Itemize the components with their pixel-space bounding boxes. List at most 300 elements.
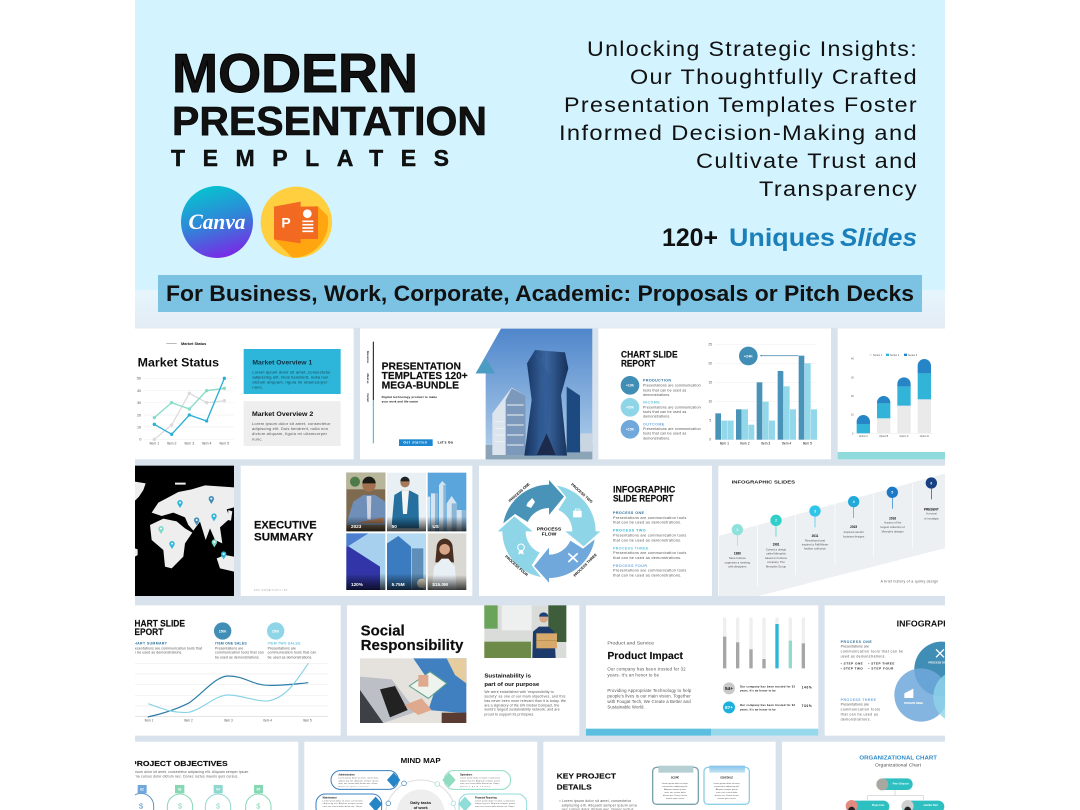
- slide: timeline infographic: A brief history of a quirky design: [881, 580, 938, 584]
- slide: key project details: • Lorem ipsum dolor sit amet, consectetur: [559, 799, 632, 803]
- slide: mind map: of work: [414, 805, 429, 810]
- slide: presentation mega bundle: Digital technology product to make: [382, 395, 437, 399]
- stat: 54+: years. It's an honor to be: [740, 689, 776, 693]
- card: market overview 1: [244, 349, 341, 394]
- org node: top: [876, 778, 913, 790]
- slide: chart report: +15K: [626, 428, 635, 432]
- slide: process flow: PROCESS ONE: [613, 511, 645, 515]
- slide: chart report: +50K: [626, 406, 635, 410]
- slide: chart report: tools that can be used as: [643, 388, 687, 392]
- card: scope: Lorem ipsum dolor sit amet,: [662, 782, 689, 785]
- card: market overview 1: dictum aliquam, ligula mi ullamcorper: [252, 379, 328, 384]
- timeline labels: 2015: [850, 525, 857, 529]
- cycle diagram: PROCESS THREE: [573, 552, 598, 578]
- node: maintenance: [316, 794, 391, 810]
- slide: process flow: that can be used as demonstrations.: [613, 538, 681, 542]
- timeline labels: organizes a meeting: [725, 560, 750, 564]
- objective icons: 02: [140, 788, 144, 792]
- tagline text: [559, 38, 918, 201]
- banner: [158, 275, 922, 312]
- slide: process flow: Presentations are communication tools: [613, 516, 686, 520]
- slide: product impact: people's lives is our main vision. Together: [607, 693, 691, 698]
- node: maintenance: Lorem ipsum dolor sit amet, consectetur: [323, 799, 363, 802]
- line chart: Item 4: [263, 719, 272, 723]
- slide: product impact: Product and Service: [607, 640, 655, 645]
- slide: social responsibility: Responsibility: [361, 637, 464, 654]
- icon: medal: [518, 544, 524, 555]
- line chart: [137, 377, 234, 445]
- timeline markers: 4: [853, 500, 855, 504]
- slide: chart report: tools that can be used as: [643, 432, 687, 436]
- timeline markers: [732, 477, 937, 546]
- card: scope: SCOPE: [671, 778, 680, 780]
- slide: chart report: Presentations are communication: [643, 405, 701, 409]
- card: market overview 2: Market Overview 2: [252, 411, 314, 418]
- slide: social responsibility: part of our purpose: [484, 682, 539, 688]
- bar chart: 15: [708, 380, 712, 384]
- card: scope: [653, 766, 698, 804]
- slide: infographic venn: Presentations are: [841, 703, 869, 707]
- timeline labels: A revival: [926, 512, 937, 516]
- title: MODERN: [172, 42, 418, 104]
- bar chart: [708, 342, 817, 446]
- stat: 87+: Our company has been trusted for 32: [740, 703, 796, 707]
- timeline labels: Coined a design: [766, 547, 787, 551]
- stat: 87+: [723, 701, 812, 713]
- slide: chart report: demonstrations.: [643, 436, 670, 440]
- infographic canvas: [135, 0, 945, 810]
- slide: chart report lines: 250K: [272, 629, 280, 633]
- lower background: [135, 290, 945, 810]
- photo: businessman 2023: 2023: [351, 524, 362, 529]
- timeline markers: 2: [775, 519, 777, 523]
- timeline labels: [725, 507, 939, 569]
- slide: social responsibility: Sustainability is: [484, 674, 531, 680]
- slide: chart report: +10K: [626, 384, 635, 388]
- slide: infographic venn: used as demonstrations.: [841, 654, 886, 658]
- slide: social responsibility: proud to support its principles.: [484, 712, 534, 716]
- photo: towers US: US: [432, 524, 439, 529]
- timeline markers: 3: [814, 509, 816, 513]
- slide: chart report lines: Presentations are communication tools that: [131, 646, 202, 650]
- slide: market status: [133, 328, 354, 459]
- tagline text: Presentation Templates Foster: [564, 94, 918, 117]
- tagline text: Cultivate Trust and: [696, 150, 918, 173]
- card: market overview 1: Lorem ipsum dolor sit amet, consectetur: [252, 369, 331, 374]
- icon: tools: [568, 553, 578, 562]
- node: administration: [331, 771, 406, 789]
- line chart: Item 2: [184, 719, 193, 723]
- slide: organizational chart: [782, 742, 949, 810]
- header background: [135, 0, 945, 290]
- timeline markers: 6: [930, 481, 932, 485]
- row two slides: [133, 466, 472, 596]
- timeline labels: largest collection of: [881, 525, 905, 529]
- card: schedule: Lorem ipsum dolor sit amet,: [713, 782, 740, 785]
- timeline labels: Auction of the: [884, 521, 902, 525]
- bar chart: 25: [708, 342, 712, 346]
- photo grid: [346, 473, 466, 590]
- timeline labels: company. The: [767, 560, 785, 564]
- slide: presentation mega bundle: Contact: [366, 393, 369, 402]
- button: [399, 439, 433, 446]
- title: [171, 53, 484, 166]
- slide: chart report lines: REPORT: [128, 627, 164, 637]
- slide: stacked bars: 30: [851, 376, 854, 379]
- stat: 54+: Our company has been trusted for 32: [740, 684, 796, 688]
- slide: social responsibility: world's largest sustainability network, and are: [484, 708, 560, 712]
- tagline text: Our Thoughtfully Crafted: [630, 66, 918, 89]
- card: market overview 2: dictum aliquam, ligula mi ullamcorper: [252, 431, 328, 436]
- slide: presentation mega bundle: TEMPLATES 120+: [382, 371, 468, 382]
- card: market overview 2: [244, 401, 341, 446]
- bar chart: 5: [709, 419, 711, 423]
- slide: process flow: INFOGRAPHIC: [613, 485, 676, 495]
- photo: glass building: 5.75M: [392, 582, 405, 587]
- slide: project objectives: PROJECT OBJECTIVES: [131, 761, 228, 768]
- timeline labels: Inspired colorful: [844, 530, 864, 534]
- slide: product impact: Sustainable World.: [607, 705, 645, 710]
- timeline labels: based on fortress: [765, 556, 788, 560]
- header fade strip: [135, 290, 945, 328]
- slide: mind map: Daily tasks: [410, 800, 432, 805]
- slide: world map: [133, 466, 234, 596]
- slide: market status: Market Status: [181, 342, 207, 346]
- slide: infographic venn: Presentations are: [841, 645, 869, 649]
- slide: infographic venn: • STEP ONE: [841, 662, 863, 666]
- row three slides: [128, 605, 579, 736]
- objective icons: 04: [216, 788, 220, 792]
- slide: process flow: that can be used as demonstrations.: [613, 521, 681, 525]
- timeline labels: 2011: [812, 534, 819, 538]
- cycle diagram: PROCESS ONE: [508, 482, 531, 503]
- photo: purple building: 120%: [351, 582, 364, 587]
- card: market overview 1: Market Overview 1: [252, 360, 313, 367]
- card: market overview 2: Lorem ipsum dolor sit amet, consectetur: [252, 421, 331, 426]
- line chart: Item 1: [145, 719, 154, 723]
- timeline labels: 2016: [889, 516, 896, 520]
- line chart: Item 5: [303, 719, 312, 723]
- org node: right: [902, 800, 944, 810]
- timeline labels: called Memphis: [766, 552, 786, 556]
- slide: chart report: CHART SLIDE: [621, 350, 678, 360]
- slide: process flow: PROCESS THREE: [613, 546, 649, 550]
- slide: stacked bars: Series 3: [908, 354, 918, 357]
- slide: social responsibility: are a signatory of the UN Global Compact, the: [484, 703, 559, 707]
- slide: product impact: [586, 605, 818, 736]
- node: operations: urna, nec cursus dolor dictum nec. Donec: [460, 782, 499, 785]
- slide: product impact: Product Impact: [607, 651, 684, 662]
- tagline text: Unlocking Strategic Insights:: [587, 38, 918, 61]
- slide: presentation mega bundle: [360, 328, 592, 459]
- slide: infographic venn: • STEP THREE: [868, 662, 894, 666]
- slide: chart report: INCOME: [643, 401, 660, 405]
- slide: chart report lines: can be used as demonstrations.: [130, 651, 182, 655]
- slide: social responsibility: We were established with 'responsibility to: [484, 690, 554, 694]
- slide: stacked bars: Option D: [920, 435, 929, 438]
- cycle diagram: [498, 480, 600, 583]
- slide: stacked bars: [838, 328, 951, 459]
- slide: product impact: Providing Appropriate Technology to help: [607, 688, 692, 693]
- slide count heading: Uniques: [729, 224, 835, 252]
- slide: chart report: OUTCOME: [643, 422, 665, 426]
- timeline labels: 1981: [772, 543, 780, 547]
- node: financial reporting: Financial Reporting: [475, 796, 497, 799]
- slide: infographic venn: [825, 605, 987, 736]
- slide: executive summary: [241, 466, 472, 596]
- cycle diagram: FLOW: [542, 531, 557, 537]
- slide: stacked bars: Series 2: [890, 354, 900, 357]
- objective icons: 05: [256, 788, 260, 792]
- slide: chart report lines: CHART SUMMARY: [131, 641, 168, 645]
- stat: 54+: 54+: [725, 686, 733, 691]
- icon: briefcase: [573, 509, 582, 517]
- slide: mind map: [304, 742, 537, 810]
- line chart: Item 4: [202, 441, 212, 445]
- timeline labels: PRESENT: [924, 507, 939, 511]
- slide: infographic venn: that can be used as: [841, 712, 878, 716]
- bar chart: Item 2: [740, 442, 750, 446]
- node: maintenance: urna, nec cursus dolor dictum nec. Donec: [323, 805, 362, 808]
- card: scope: consectetur adipiscing elit.: [662, 785, 688, 788]
- slide: chart report: [598, 328, 831, 459]
- card: market overview 1: adipiscing elit. Duis hendrerit, nulla non: [252, 374, 328, 379]
- venn diagram: PROCESS THREE: [904, 701, 924, 705]
- icon: powerpoint logo: P: [281, 215, 291, 231]
- line chart: 10: [137, 425, 141, 429]
- slide: stacked bars: 20: [851, 395, 854, 398]
- line chart: Item 3: [184, 441, 194, 445]
- tagline text: Transparency: [759, 178, 918, 201]
- slide: chart report: REPORT: [621, 359, 656, 369]
- stat: 54+: 140%: [802, 686, 812, 690]
- card: schedule: urna, nec cursus dolor: [716, 791, 738, 794]
- slide: stacked bars: Series 1: [873, 354, 883, 357]
- timeline labels: 1980: [734, 551, 741, 555]
- slide: chart report lines: ITEM TWO SALES: [268, 641, 301, 645]
- line chart: 0: [139, 438, 141, 442]
- slide count heading: 120+: [662, 224, 718, 252]
- slide: process flow: SLIDE REPORT: [613, 494, 674, 504]
- tagline text: Informed Decision-Making and: [559, 122, 918, 145]
- node: financial reporting: Lorem ipsum dolor sit amet, consectetur: [475, 799, 515, 802]
- card: scope: dictum nec. Donec luctus: [663, 794, 687, 797]
- row one slides: [133, 328, 592, 459]
- card: scope: mauris quis cursus: [666, 797, 684, 800]
- slide: chart report lines: Presentations are: [215, 646, 243, 650]
- slide: stacked bars: Option A: [859, 435, 868, 438]
- objective icons: [128, 785, 271, 810]
- slide: infographic venn: • STEP FOUR: [868, 667, 894, 671]
- slide: process flow: that can be used as demonstrations.: [613, 574, 681, 578]
- slide: executive summary: www.reallygreatsite.com: [254, 589, 288, 592]
- node: financial reporting: adipiscing elit. Aliquam semper ipsum: [475, 802, 515, 805]
- slide: social responsibility: Social: [361, 623, 405, 640]
- slide: key project details: KEY PROJECT: [557, 771, 617, 780]
- slide: market status: Market Status: [138, 356, 219, 370]
- line chart: 30: [137, 401, 141, 405]
- icon: powerpoint logo: [261, 187, 332, 258]
- photo: skyscrapers: [476, 329, 592, 459]
- icon: canva logo: [181, 186, 253, 258]
- slide: organizational chart: Organizational Chart: [875, 762, 922, 767]
- timeline labels: Store fortress: [729, 556, 746, 560]
- slide: infographic venn: communication tools that can be: [841, 649, 903, 653]
- callout: +24K: [744, 354, 753, 358]
- bar chart: Item 5: [803, 442, 812, 446]
- slide: chart report lines: be used as demonstrations.: [215, 655, 260, 659]
- slide: social responsibility: [347, 605, 579, 736]
- line chart: Item 3: [224, 719, 233, 723]
- slide: mind map: MIND MAP: [401, 758, 441, 765]
- slide: process flow: that can be used as demonstrations.: [613, 556, 681, 560]
- slide: project objectives: urna cursus dolor dictum nec. Donec luctus mauris quis cursus.: [132, 775, 238, 779]
- slide: project objectives: Lorem ipsum dolor sit amet, consectetur adipiscing elit. Aliquam semper ipsum: [122, 770, 249, 774]
- slide: chart report: demonstrations.: [643, 415, 670, 419]
- cycle diagram: PROCESS: [537, 526, 562, 532]
- slide: chart report lines: [128, 605, 341, 736]
- slide: executive summary: SUMMARY: [254, 532, 313, 544]
- org node: left: Bryan Cole: [872, 805, 885, 807]
- slide: key project details: DETAILS: [557, 783, 592, 792]
- slide: presentation mega bundle: PRESENTATION: [382, 362, 461, 373]
- slide: process flow: PROCESS FOUR: [613, 564, 647, 568]
- slide: process flow: Presentations are communication tools: [613, 569, 686, 573]
- slide: presentation mega bundle: Let's Go: [438, 441, 453, 445]
- slide: chart report lines: ITEM ONE SALES: [215, 641, 247, 645]
- timeline labels: with designers: [728, 565, 747, 569]
- slide: chart report lines: communication tools that can: [215, 651, 264, 655]
- node: operations: adipiscing elit. Aliquam semper ipsum: [460, 779, 500, 782]
- card: scope: Aliquam semper ipsum: [664, 788, 686, 791]
- venn diagram: [894, 642, 987, 723]
- bar chart: 0: [709, 438, 711, 442]
- photo: businessman 50: 50: [392, 524, 397, 529]
- node: administration: Lorem ipsum dolor sit amet, consectetur: [338, 777, 379, 780]
- venn diagram: PROCESS ONE: [928, 660, 948, 664]
- card: market overview 2: nunc.: [252, 437, 263, 442]
- slide: stacked bars: 10: [851, 414, 854, 417]
- org node: top: Peter Simpson: [893, 782, 910, 785]
- slide: stacked bars: 40: [851, 357, 854, 360]
- line chart: 20: [137, 413, 141, 417]
- cycle diagram: PROCESS TWO: [570, 483, 593, 504]
- node: maintenance: Maintenance: [323, 796, 337, 799]
- timeline labels: of nostalgia: [924, 516, 939, 520]
- slide: social responsibility: has never been more relevant than it is today. We: [484, 699, 566, 703]
- node: operations: mauris quis cursus: [460, 785, 490, 788]
- org node: left: [846, 800, 889, 810]
- slide: process flow: Presentations are communication tools: [613, 533, 686, 537]
- progress bars: [723, 617, 805, 668]
- line chart: 40: [137, 389, 141, 393]
- slide: key project details: adipiscing elit. Aliquam semper ipsum urna: [562, 803, 637, 807]
- title: TEMPLATES: [171, 145, 449, 171]
- timeline markers: 5: [891, 491, 893, 495]
- slide: presentation mega bundle: MEGA-BUNDLE: [382, 380, 460, 391]
- slide: product impact: Our company has been trusted for 32: [607, 667, 686, 672]
- node: financial reporting: urna, nec cursus dolor dictum nec. Donec: [475, 805, 514, 808]
- bar chart: Item 4: [782, 442, 791, 446]
- stat: 87+: years. It's an honor to be: [740, 707, 776, 711]
- cycle diagram: PROCESS FOUR: [504, 555, 529, 577]
- slide: timeline infographic: INFOGRAPHIC SLIDES: [732, 480, 796, 486]
- timeline labels: Memphis Group: [766, 564, 786, 568]
- slide: executive summary: EXECUTIVE: [254, 519, 317, 531]
- slide: infographic venn: • STEP TWO: [841, 667, 863, 671]
- slide: stacked bars: 0: [852, 432, 854, 435]
- slide: infographic venn: demonstrations.: [841, 717, 871, 721]
- slide: social responsibility: society' as one of our main objectives, and this: [484, 694, 566, 698]
- line chart: 50: [137, 377, 141, 381]
- slide: process flow: Presentations are communication tools: [613, 551, 686, 555]
- stat: 87+: 87+: [725, 705, 733, 710]
- stat: 54+: [723, 682, 812, 694]
- slide: chart report: PRODUCTION: [643, 379, 671, 383]
- stat: 87+: 730%: [802, 704, 812, 708]
- slide: project objectives: [122, 742, 298, 810]
- slide: chart report: tools that can be used as: [643, 410, 687, 414]
- title: PRESENTATION: [172, 98, 487, 144]
- slide: chart report lines: 150K: [219, 629, 227, 633]
- photo: delivery man: [484, 605, 566, 658]
- timeline labels: fashion collection: [804, 547, 826, 551]
- line chart: Item 2: [167, 441, 177, 445]
- card: schedule: dictum nec. Donec luctus: [715, 794, 739, 797]
- slide: presentation mega bundle: About us: [366, 373, 369, 384]
- node: financial reporting: [451, 794, 527, 810]
- card: market overview 2: adipiscing elit. Duis hendrerit, nulla non: [252, 426, 328, 431]
- timeline labels: Resurfaced and: [805, 539, 825, 543]
- objective icons: 03: [178, 788, 182, 792]
- slide: stacked bars: Option C: [899, 435, 909, 438]
- timeline labels: inspired a Fall/Winter: [802, 543, 828, 547]
- org node: right: Jennifer Ruiz: [923, 805, 939, 807]
- card: schedule: consectetur adipiscing elit.: [714, 785, 740, 788]
- slide: product impact: years. It's an honor to be: [607, 673, 660, 678]
- node: maintenance: adipiscing elit. Aliquam semper ipsum: [323, 802, 363, 805]
- slide: presentation mega bundle: Resources: [366, 351, 368, 364]
- icon: tag: [526, 498, 535, 508]
- card: schedule: SCHEDULE: [720, 778, 734, 780]
- slide: timeline infographic: [718, 466, 952, 596]
- line chart: [135, 663, 328, 723]
- timeline labels: Memphis designs: [882, 529, 904, 533]
- slide: product impact: with Fougat Tech, We Create a Better and: [607, 699, 691, 704]
- node: administration: Administration: [338, 773, 355, 776]
- timeline markers: 1: [736, 528, 738, 532]
- slide: chart report lines: Presentations are: [268, 646, 296, 650]
- slide: stacked bars: Option B: [879, 435, 889, 438]
- card: scope: urna, nec cursus dolor: [664, 791, 686, 794]
- button: Get started: [403, 441, 427, 445]
- line chart: Item 1: [149, 441, 159, 445]
- card: market overview 1: nunc.: [252, 385, 263, 390]
- bar chart: Item 1: [720, 442, 729, 446]
- stacked column chart: [857, 359, 931, 433]
- slide: chart report: Presentations are communication: [643, 384, 701, 388]
- slide: infographic venn: communication tools: [841, 707, 880, 711]
- bar chart: 10: [708, 400, 712, 404]
- slide: organizational chart: ORGANIZATIONAL CHART: [859, 755, 938, 761]
- line chart: Item 5: [219, 441, 229, 445]
- node: administration: adipiscing elit. Aliquam semper ipsum: [338, 779, 379, 782]
- node: operations: Lorem ipsum dolor sit amet, consectetur: [460, 777, 500, 780]
- slide: chart report lines: be used as demonstrations.: [268, 655, 312, 659]
- slide count heading: Slides: [840, 224, 917, 252]
- timeline labels: footwear designs: [843, 534, 865, 538]
- slide: process flow: [479, 466, 712, 596]
